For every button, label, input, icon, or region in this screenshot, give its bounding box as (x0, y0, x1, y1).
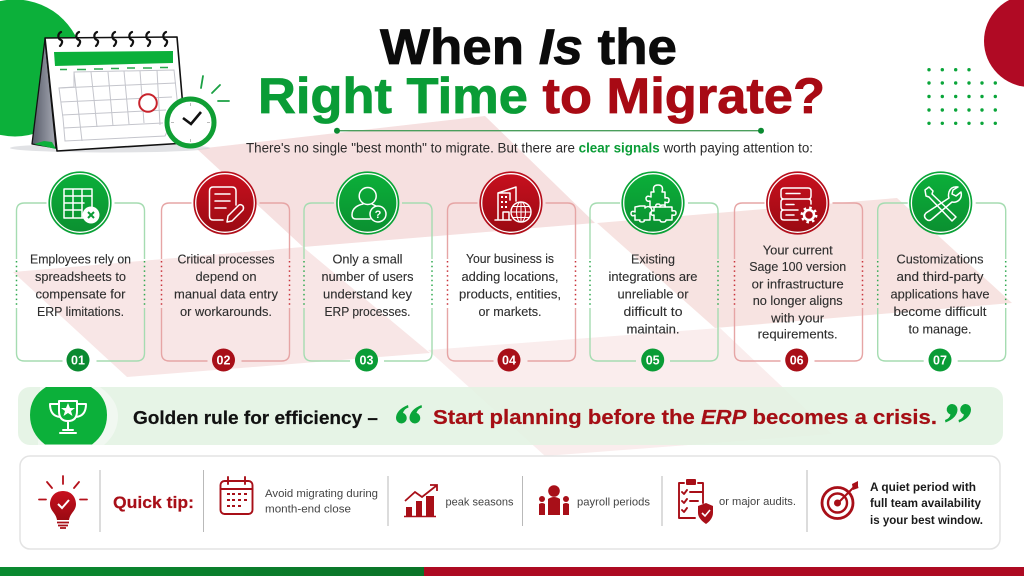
icon: light bulb with check (39, 476, 87, 528)
decoration: green circle top left (0, 0, 84, 136)
badge: 04: 04 (502, 354, 516, 368)
text: signal 07: applications have (890, 286, 990, 302)
decoration: red circle top right (984, 0, 1024, 87)
text: best window (870, 482, 983, 527)
footer bar: red segment (424, 567, 1024, 576)
text: signal 02: manual data entry (174, 286, 278, 302)
panel: signal 05 (590, 172, 718, 372)
panel: signal 04 (448, 172, 576, 372)
text: signal 07: and third-party (896, 269, 984, 284)
icon: closing quote (945, 404, 971, 422)
text: signal 06: no longer aligns (753, 293, 843, 308)
badge: 01: 01 (71, 354, 85, 368)
decoration: dot grid (927, 68, 997, 125)
text: signal 05: maintain. (626, 322, 680, 336)
text: best window: full team availability (870, 498, 982, 510)
text: signal 03: ERP processes. (324, 304, 410, 319)
badge: 07 (928, 348, 952, 372)
text: signal 03: understand key (323, 286, 412, 302)
title divider with end dots (334, 128, 764, 134)
text: month-end close: month-end close (265, 504, 351, 516)
text: signal 05: integrations are (608, 269, 698, 284)
panel: signal 03 (304, 172, 432, 372)
text: signal 06: with your (770, 310, 825, 326)
badge: 01 (66, 348, 90, 372)
text: signal 01: ERP limitations. (37, 304, 124, 319)
icon: spreadsheet with x (49, 172, 111, 234)
text: best window: A quiet period with (870, 482, 976, 494)
panel: signal 07 (878, 172, 1006, 372)
text: signal 03: number of users (322, 269, 414, 284)
text: signal 06 (749, 242, 846, 342)
icon: trophy on green badge (30, 387, 118, 445)
text: signal 05: difficult to (624, 304, 682, 319)
icon: server with gear (767, 172, 829, 234)
text: signal 06: or infrastructure (752, 276, 844, 292)
text: signal 02: Critical processes (178, 252, 275, 266)
title line 1: When Is the (380, 19, 677, 75)
panel: signal 06 (734, 172, 862, 372)
icon: target with arrow (822, 481, 858, 518)
text: major audits: or major audits. (719, 496, 796, 508)
text: signal 04 (459, 251, 561, 319)
title line 2: Right Time to Migrate? (258, 68, 825, 124)
text: signal 06: Sage 100 version (749, 259, 846, 274)
background: pale red diagonal bands (13, 116, 1012, 456)
text: signal 02: depend on (196, 269, 256, 284)
text: golden rule quote: Start planning before the ERP becomes a crisis. (433, 406, 937, 429)
icon: opening quote (396, 405, 422, 423)
badge: 06 (785, 348, 808, 372)
text: signal 04: adding locations, (462, 269, 558, 284)
icon: user with question mark: ? (375, 209, 382, 221)
panel: signal 02 (162, 172, 290, 372)
text: signal 03: Only a small (332, 252, 403, 266)
panel: quick tip (20, 456, 1000, 549)
text: signal 04: Your business is (466, 251, 554, 266)
text: signal 06: Your current (763, 242, 833, 258)
text: signal 04: products, entities, (459, 286, 561, 302)
text: signal 02: or workarounds. (180, 304, 272, 319)
badge: 02: 02 (217, 354, 230, 368)
text: signal 01: compensate for (36, 286, 126, 302)
badge: 06: 06 (790, 354, 804, 368)
text: golden rule label: Golden rule for efficiency – (133, 408, 378, 428)
panel: golden rule banner (18, 387, 1003, 445)
text: signal 05: Existing (631, 252, 675, 266)
text: signal 06: requirements. (758, 326, 838, 342)
badge: 05: 05 (646, 354, 660, 368)
badge: 04 (498, 348, 520, 372)
icon: clipboard with shield (679, 479, 713, 524)
panel: signal 01 (16, 172, 144, 372)
text: best window: is your best window. (870, 515, 983, 527)
text: month-end close: Avoid migrating during (265, 488, 378, 500)
badge: 03: 03 (360, 354, 373, 368)
text: signal 01: Employees rely on (30, 252, 131, 266)
text: signal 01 (30, 252, 131, 319)
icon: document with pencil (194, 172, 256, 234)
icon: user with question mark (337, 172, 399, 234)
subtitle: There's no single "best month" to migrate. But there are clear signals worth paying attention to: (246, 140, 813, 156)
text: payroll periods: payroll periods (577, 496, 651, 508)
icon: rising bar chart (404, 485, 437, 516)
text: peak seasons: peak seasons (446, 496, 514, 508)
badge: 05 (641, 348, 664, 372)
icon: people (539, 485, 569, 515)
icon: desk calendar with clock (10, 32, 229, 152)
badge: 02 (212, 348, 235, 372)
text: signal 07 (890, 252, 990, 336)
text: month-end close (265, 488, 378, 516)
badge: 07: 07 (933, 354, 947, 368)
text: signal 01: spreadsheets to (35, 269, 126, 284)
text: quick tip label: Quick tip: (113, 493, 194, 512)
text: signal 05 (608, 252, 698, 336)
text: signal 05: unreliable or (618, 286, 689, 302)
badge: 03 (355, 348, 378, 372)
text: signal 04: or markets. (478, 304, 542, 319)
footer bar: green segment (0, 567, 424, 576)
text: signal 07: Customizations (896, 252, 984, 266)
text: signal 07: to manage. (908, 322, 972, 336)
text: signal 07: become difficult (894, 304, 987, 319)
text: signal 03 (322, 252, 414, 319)
text: signal 02 (174, 252, 278, 319)
icon: building with globe (480, 172, 542, 234)
icon: crossed wrench and screwdriver (910, 172, 972, 234)
icon: calendar (220, 477, 252, 514)
title (258, 19, 825, 124)
icon: puzzle pieces (622, 172, 684, 234)
